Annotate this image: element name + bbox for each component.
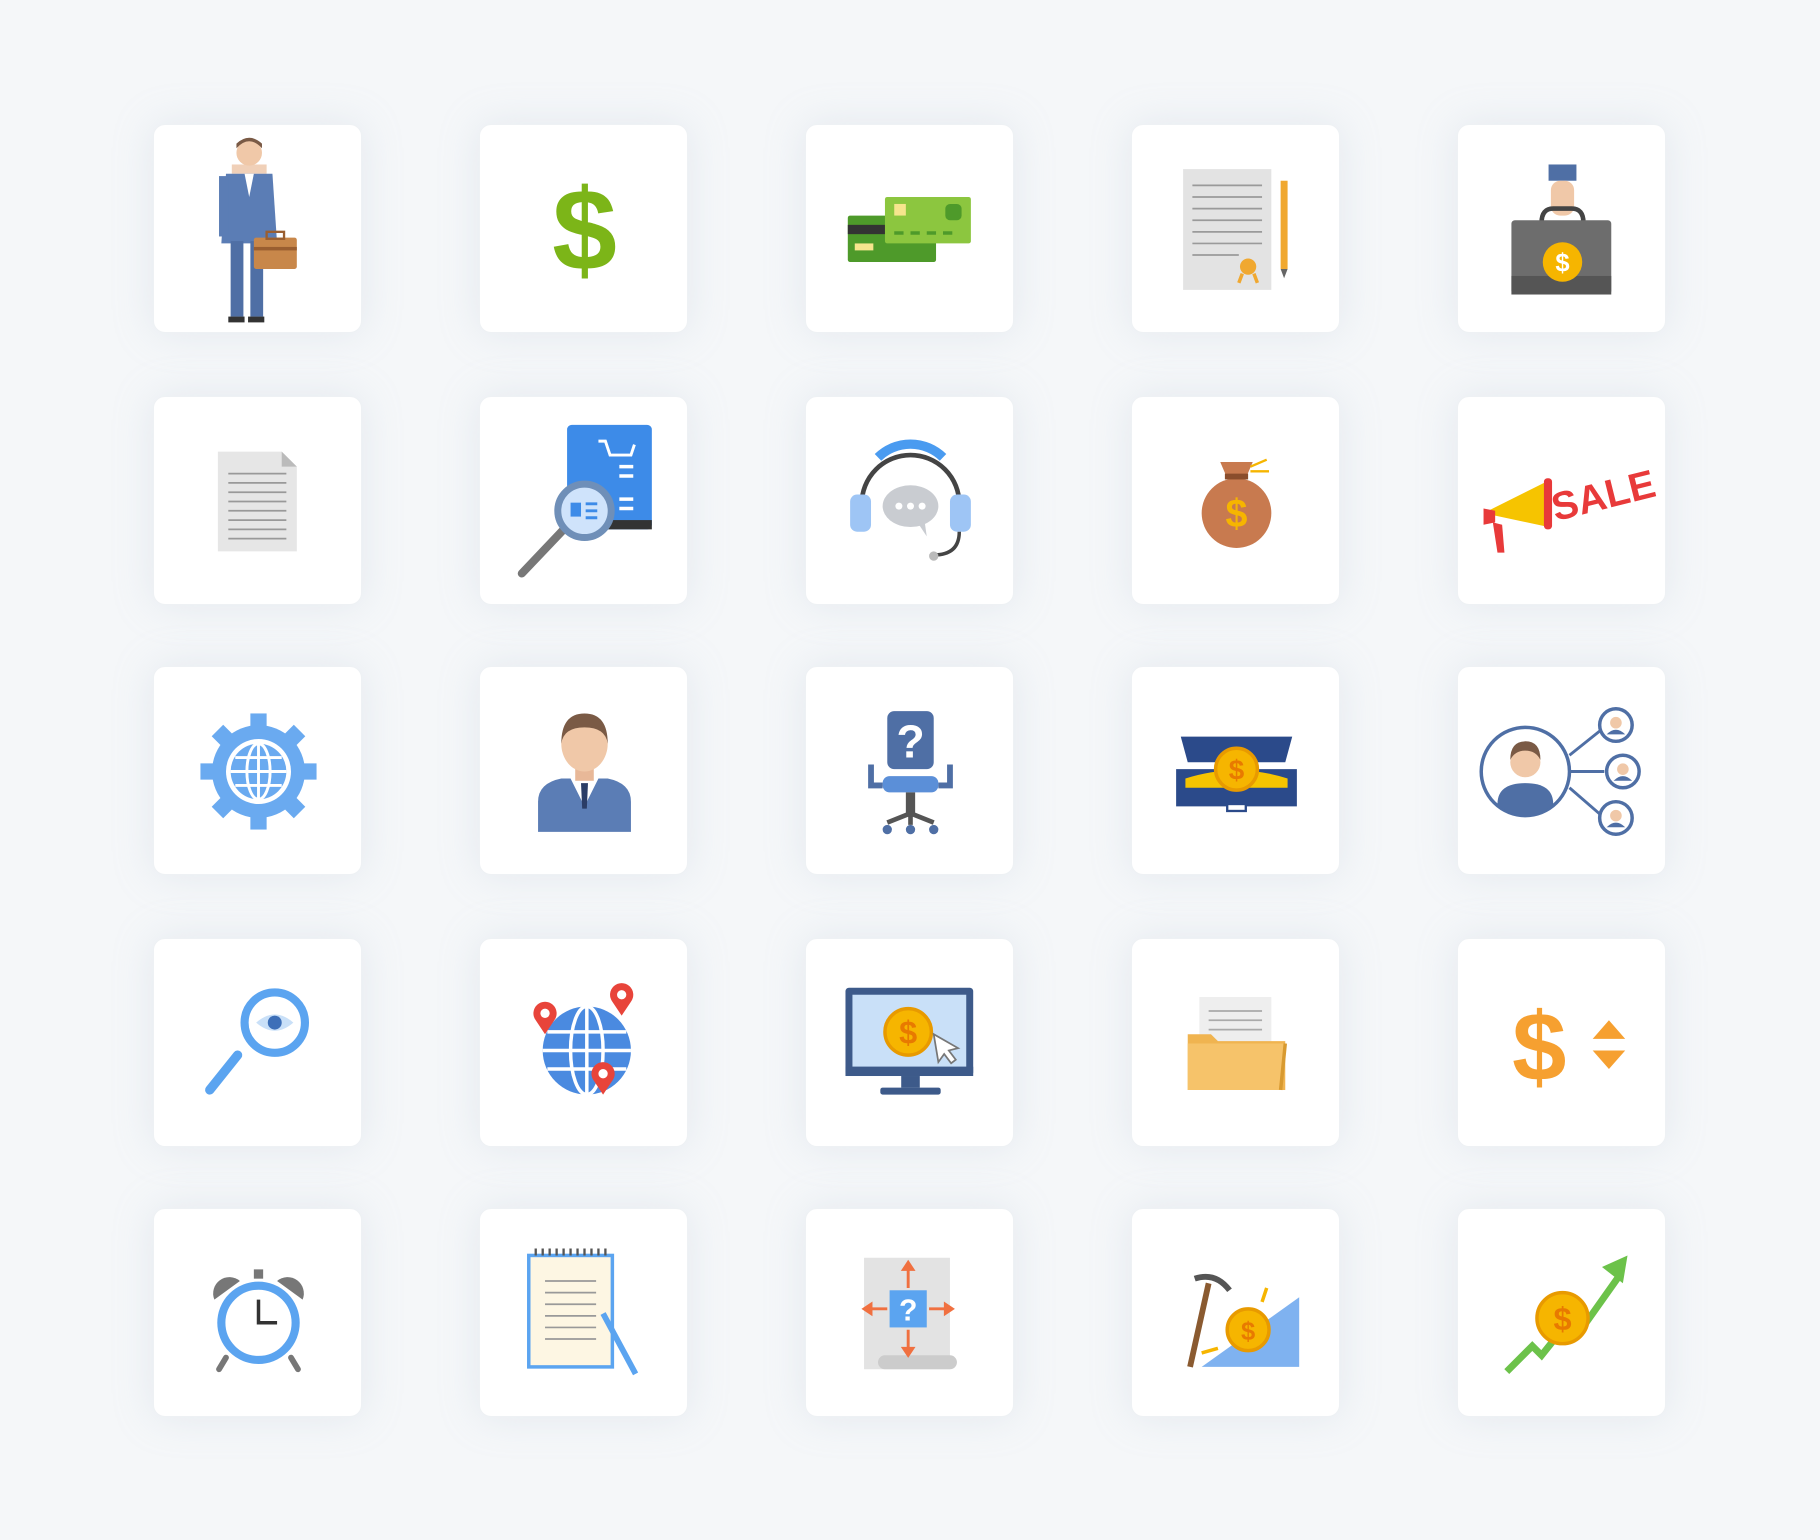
tile: money bag: $ bbox=[1226, 492, 1248, 536]
tile: document bbox=[153, 396, 362, 605]
tile: hand with briefcase bbox=[1457, 124, 1666, 333]
tile: headset bbox=[805, 396, 1014, 605]
tile: money bag bbox=[1131, 396, 1340, 605]
tile: pickaxe coin hill bbox=[1131, 1208, 1340, 1417]
tile: globe pins bbox=[479, 938, 688, 1147]
tile: monitor coin bbox=[805, 938, 1014, 1147]
tile: sale megaphone bbox=[1457, 396, 1666, 605]
tile: coin growth: $ bbox=[1553, 1301, 1572, 1337]
tile: magnifier eye bbox=[153, 938, 362, 1147]
tile: coin growth bbox=[1457, 1208, 1666, 1417]
tile: dollar arrows bbox=[1457, 938, 1666, 1147]
tile: businessman bbox=[153, 124, 362, 333]
tile: tablet search bbox=[479, 396, 688, 605]
tile: alarm clock bbox=[153, 1208, 362, 1417]
tile: briefcase of coins bbox=[1131, 666, 1340, 875]
tile: monitor coin: $ bbox=[899, 1015, 917, 1051]
tile: folder bbox=[1131, 938, 1340, 1147]
tile: sale megaphone: SALE bbox=[1547, 462, 1660, 530]
tile: man bust bbox=[479, 666, 688, 875]
tile: briefcase of coins: $ bbox=[1229, 755, 1245, 786]
tile: notepad bbox=[479, 1208, 688, 1417]
tile: certificate bbox=[1131, 124, 1340, 333]
tile: pickaxe coin hill: $ bbox=[1241, 1318, 1255, 1346]
tile: dollar sign: $ bbox=[552, 165, 617, 295]
tile: gear globe bbox=[153, 666, 362, 875]
tile: scroll question: ? bbox=[899, 1294, 917, 1327]
tile: hand with briefcase: $ bbox=[1555, 249, 1570, 277]
tile: chair question: ? bbox=[896, 716, 925, 768]
tile: chair question bbox=[805, 666, 1014, 875]
tile: scroll question bbox=[805, 1208, 1014, 1417]
tile: dollar arrows: $ bbox=[1512, 993, 1566, 1102]
tile: credit cards bbox=[805, 124, 1014, 333]
tile: network bbox=[1457, 666, 1666, 875]
tile: dollar sign bbox=[479, 124, 688, 333]
